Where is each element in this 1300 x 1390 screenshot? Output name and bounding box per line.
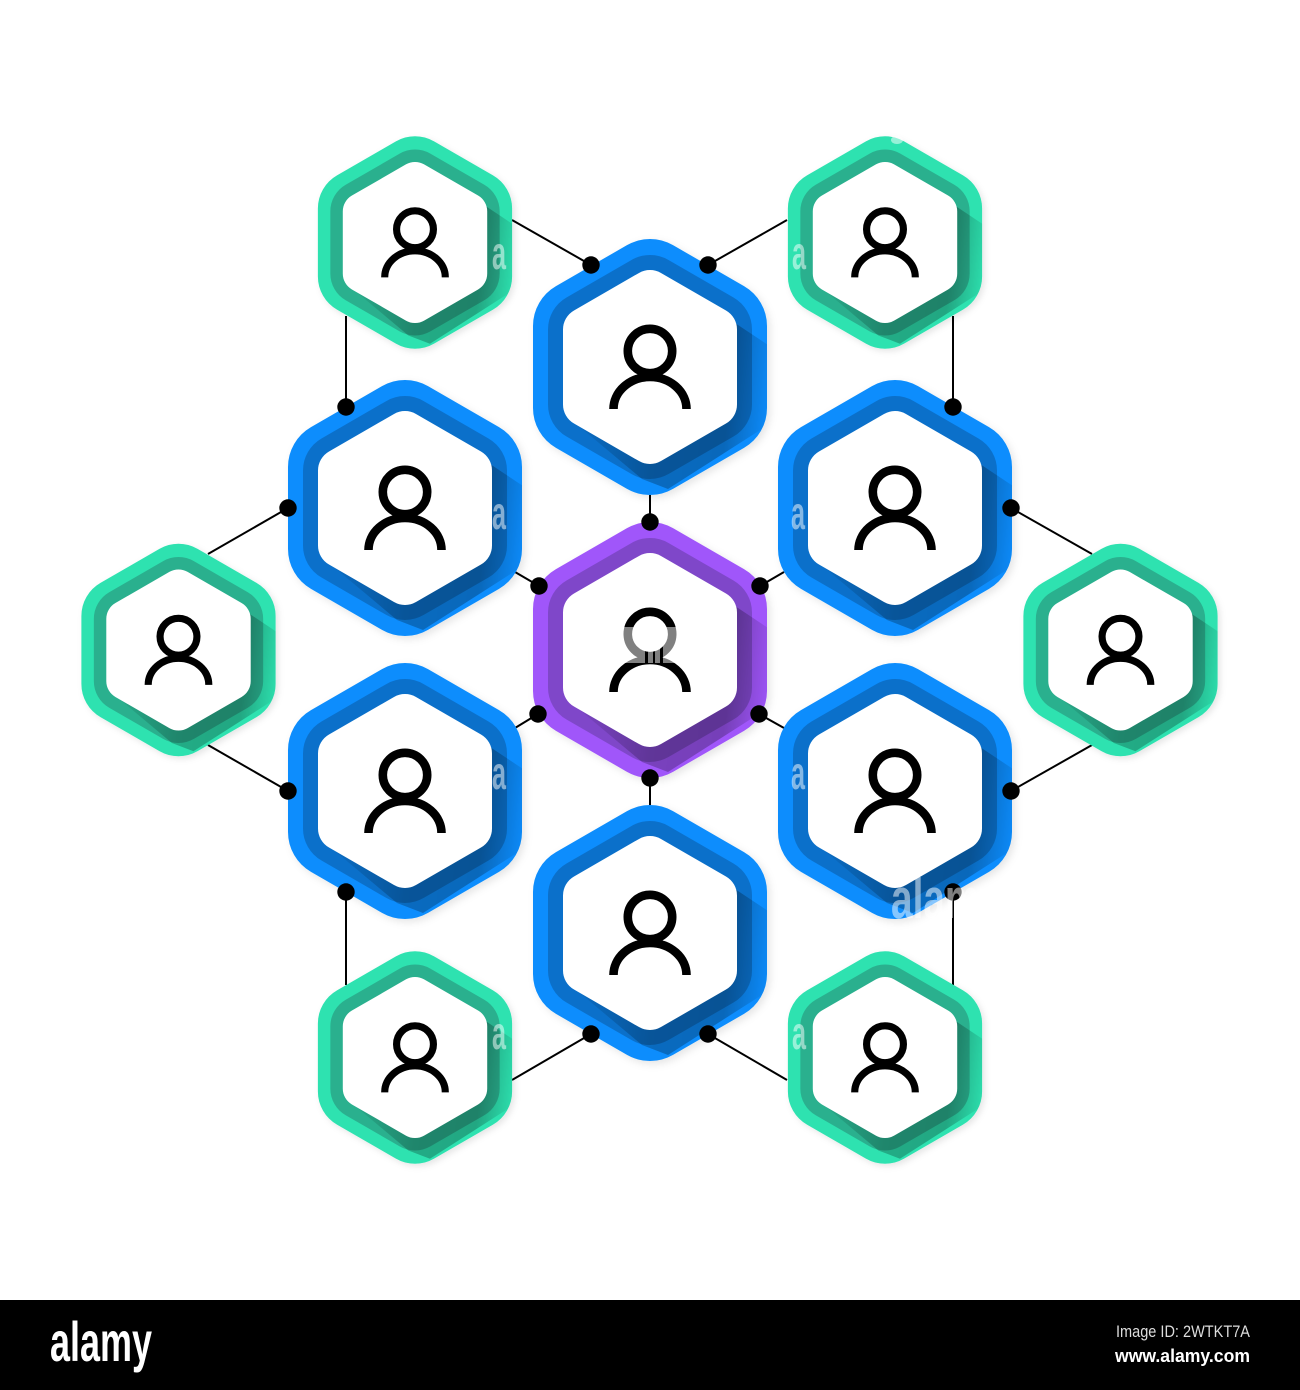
panel: blue hexagon top	[568, 285, 768, 489]
watermark fragments: a	[791, 487, 805, 539]
panel: green hexagon top left	[347, 174, 513, 344]
watermark fragments: a	[792, 227, 806, 279]
watermark fragments: a	[492, 227, 506, 279]
icon: person	[855, 211, 915, 277]
panel: green hexagon left	[110, 582, 276, 751]
panel: blue hexagon upper left	[323, 426, 523, 630]
panel: green hexagon top right	[817, 174, 983, 344]
panel: blue hexagon bottom	[568, 851, 768, 1055]
icon: person	[368, 470, 442, 550]
panel: green hexagon right	[1052, 582, 1218, 751]
connector lines	[208, 220, 1092, 1080]
footer bar	[0, 1300, 1300, 1390]
connector dots	[279, 256, 1020, 1043]
icon: person	[1090, 618, 1151, 685]
watermark fragments: a	[492, 1007, 506, 1059]
panel: purple center hexagon	[568, 568, 768, 772]
panel: green hexagon bottom left	[347, 989, 513, 1159]
icon: person	[855, 1026, 915, 1092]
icon: person	[614, 329, 686, 409]
icon: person	[614, 612, 686, 692]
panel: blue hexagon lower left	[323, 709, 523, 913]
watermark fragments: a	[792, 1007, 806, 1059]
watermark fragments: a	[791, 747, 805, 799]
icon: person	[858, 470, 932, 550]
footer image id: Image ID: 2WTKT7A	[1116, 1322, 1251, 1341]
icon: person	[385, 1026, 445, 1092]
footer logo: alamy	[50, 1310, 152, 1373]
icon: person	[148, 618, 209, 685]
icon: person	[385, 211, 445, 277]
panel: blue hexagon lower right	[813, 709, 1013, 913]
icon: person	[614, 895, 686, 975]
panel: green hexagon bottom right	[817, 989, 983, 1159]
watermark fragments: alamy	[891, 867, 1001, 931]
icon: person	[858, 753, 932, 833]
icon: person	[368, 753, 442, 833]
footer url: www.alamy.com	[1114, 1346, 1250, 1366]
watermark fragments: a	[492, 487, 506, 539]
watermark fragments	[492, 136, 1001, 1059]
panel: blue hexagon upper right	[813, 426, 1013, 630]
watermark over center icon	[623, 627, 677, 663]
watermark fragments: a	[492, 747, 506, 799]
